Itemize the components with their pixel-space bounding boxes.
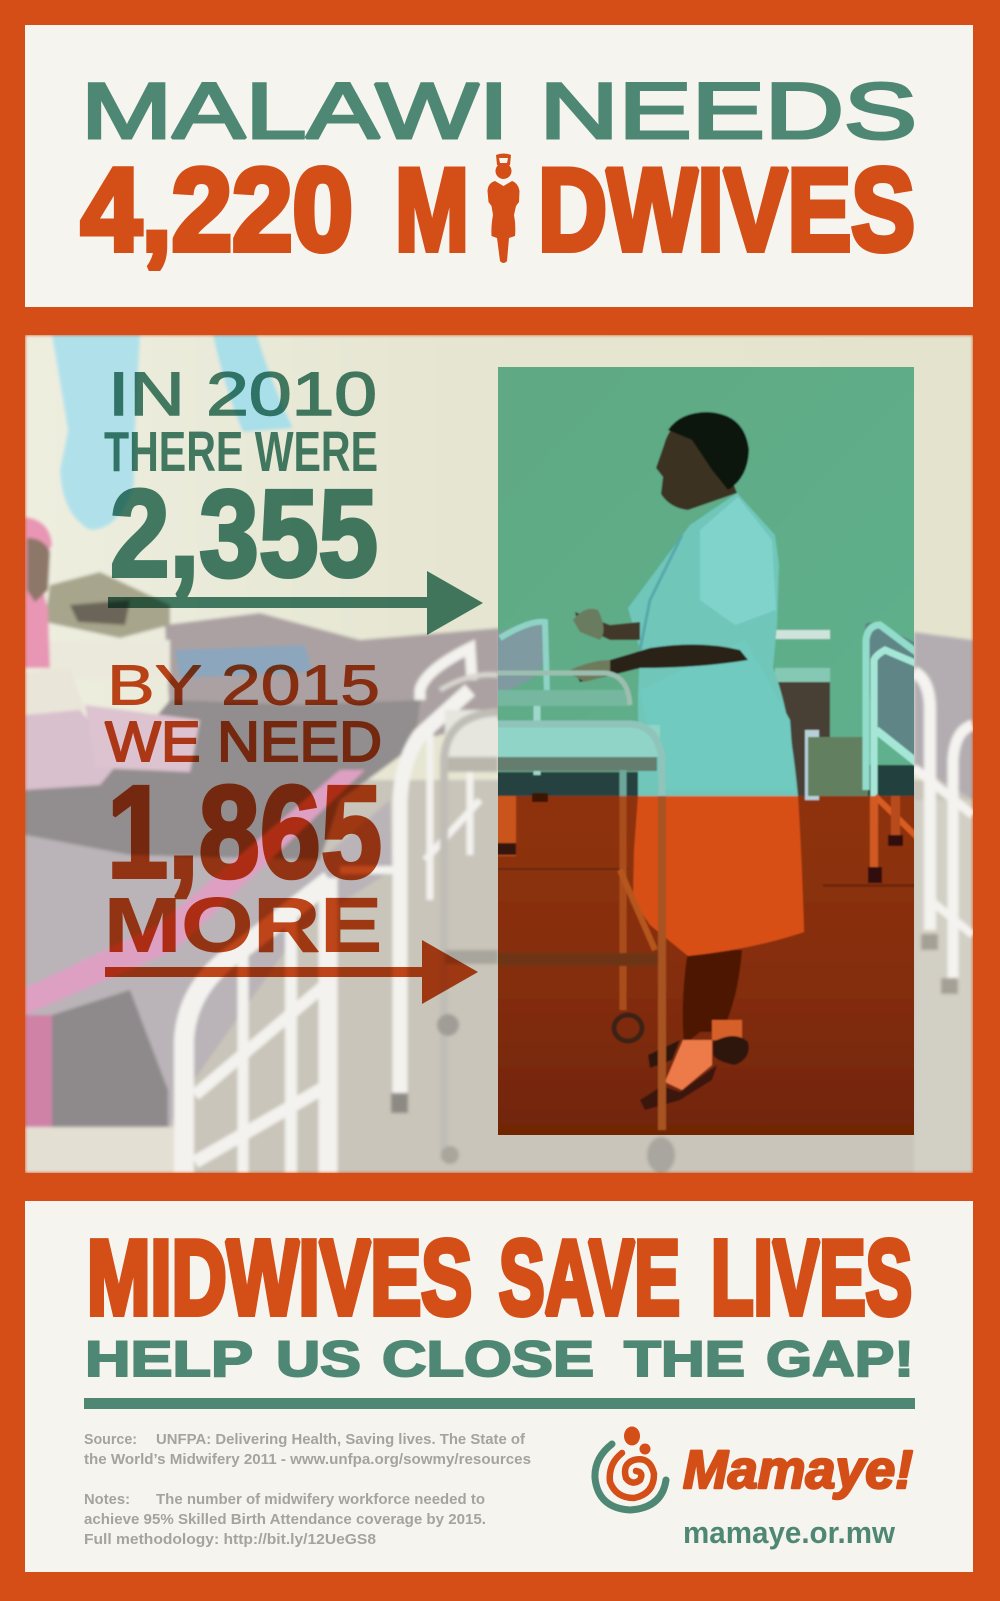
shoes: [713, 1036, 749, 1065]
clothes pile: [27, 674, 56, 713]
midwife arms: [575, 644, 748, 682]
heading: midwives save lives: [87, 1219, 912, 1337]
lower blanket: [25, 800, 392, 1127]
website: mamaye.or.mw: mamaye.or.mw: [683, 1515, 896, 1550]
midwife skirt: [633, 796, 804, 956]
bedding bundle: [45, 572, 170, 638]
label: more: MORE: [104, 882, 382, 968]
right beds: [914, 632, 973, 800]
number: 2,355: 2,355: [110, 466, 378, 603]
photo highlight: midwife in coloured rectangle: [490, 360, 920, 1141]
subheading: help us close the gap: US: [276, 1331, 361, 1387]
trolley left part: [445, 710, 498, 760]
text block: notes: achieve 95% Skilled Birth Attendance coverage by 2015.: [84, 1512, 486, 1528]
left bed behind: [498, 624, 544, 690]
child: [25, 517, 52, 668]
text block: source: [84, 1432, 531, 1468]
right table and cabinet: [770, 630, 830, 639]
red floor: [490, 796, 920, 1141]
subheading: help us close the gap: THE: [624, 1331, 745, 1387]
right bed in rect: [864, 622, 914, 756]
white frames: [184, 648, 480, 1173]
photo background: ward with beds: [25, 335, 973, 1173]
heading: M of midwives: M: [395, 144, 469, 275]
subheading: help us close the gap: GAP!: [766, 1331, 914, 1387]
teal divider bar: [84, 1398, 915, 1409]
text block: by 2015 we need 1,865 more: [104, 654, 478, 1004]
label: we need: WE NEED: [105, 710, 382, 774]
main blanket: [25, 700, 420, 860]
dark baseboard: [490, 772, 638, 796]
label: there were: THERE WERE: [104, 420, 378, 484]
patterned pillow: [175, 645, 312, 678]
label: by 2015: BY 2015: [107, 654, 380, 718]
subheading: help us close the gap: CLOSE: [382, 1331, 594, 1387]
text block: notes: The number of midwifery workforce needed to: [156, 1492, 485, 1508]
icon: midwife figure as letter I: [488, 154, 520, 263]
panel: hospital ward photo: [25, 335, 973, 1173]
pink stripe: [25, 770, 365, 1015]
text block: notes: Full methodology: http://bit.ly/12UeGS8: [84, 1532, 376, 1548]
text block: notes: [84, 1492, 486, 1548]
socks: [712, 1020, 742, 1040]
heading: Malawi needs: MALAWI NEEDS: [81, 66, 917, 155]
green wall: [490, 360, 920, 796]
bed edge: [25, 1127, 175, 1173]
bottom wheel: [647, 1137, 675, 1173]
trolley rails: [490, 690, 630, 706]
label: in 2010: IN 2010: [108, 360, 377, 428]
icon: Mamaye spiral logo: [595, 1426, 666, 1510]
feet: [391, 1093, 408, 1113]
heading: dwives: DWIVES: [538, 144, 915, 275]
number: 1,865: 1,865: [107, 758, 382, 905]
arrow: red: [105, 940, 478, 1004]
heading number: 4,220: 4,220: [81, 144, 353, 275]
back bed mattress: [164, 612, 498, 738]
arrow: teal: [108, 571, 483, 635]
legs: [683, 950, 742, 1045]
text block: notes: Notes:: [84, 1492, 130, 1508]
midwife dress: [628, 493, 798, 796]
logo wordmark: Mamaye!: Mamaye!: [683, 1440, 913, 1500]
panel: headline: [25, 25, 973, 307]
subheading: help us close the gap: [85, 1331, 914, 1387]
heading: midwives save lives: MIDWIVES: [87, 1219, 472, 1337]
text block: source: Source:: [84, 1432, 137, 1448]
heading: midwives save lives: SAVE: [499, 1219, 680, 1337]
mosquito net: [52, 335, 140, 530]
subheading: help us close the gap: HELP: [85, 1331, 253, 1387]
floor line: [823, 884, 920, 887]
text block: source: UNFPA: Delivering Health, Saving lives. The State of: [156, 1432, 525, 1448]
text block: in 2010 there were 2,355: [104, 360, 483, 635]
text block: source: the World’s Midwifery 2011 - www.unfpa.org/sowmy/resources: [84, 1452, 531, 1468]
panel: call to action and credits: [25, 1201, 973, 1572]
midwife head and hair: [656, 420, 737, 510]
